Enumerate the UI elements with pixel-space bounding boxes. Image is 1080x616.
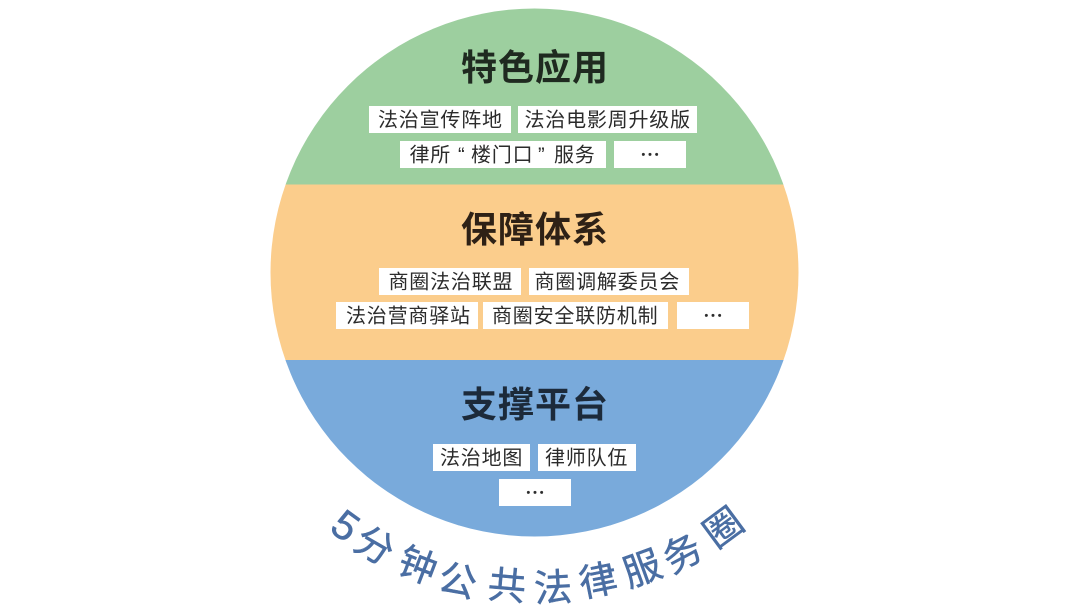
- chip: more: [499, 477, 571, 506]
- chip: 律师队伍: 律师队伍: [545, 446, 628, 470]
- heading: 支撑平台: 支撑平台: [461, 384, 609, 425]
- chip: 律所“楼门口”服务: 律所: [410, 144, 451, 166]
- chip: 商圈法治联盟: 商圈法治联盟: [388, 270, 513, 294]
- curved title: 5分钟公共法律服务圈: 律: [576, 558, 621, 606]
- curved title: 5分钟公共法律服务圈: 分: [347, 519, 401, 574]
- chip: 商圈调解委员会: 商圈调解委员会: [534, 270, 680, 294]
- chip: more: …: [525, 477, 545, 506]
- curved title: 5分钟公共法律服务圈: 5: [323, 500, 368, 551]
- chip: 律所“楼门口”服务: [400, 141, 606, 168]
- chip: 法治地图: [433, 444, 530, 471]
- chip: more: …: [703, 300, 723, 329]
- heading: 特色应用: 特色应用: [461, 47, 609, 88]
- heading: 保障体系: 保障体系: [461, 209, 609, 250]
- chip: 法治宣传阵地: 法治宣传阵地: [378, 108, 503, 132]
- curved title: 5分钟公共法律服务圈: 共: [486, 564, 528, 610]
- panel: 保障体系: [270, 184, 799, 360]
- curved title: 5分钟公共法律服务圈: 服: [618, 544, 668, 596]
- chip: 律所“楼门口”服务: 服务: [554, 144, 596, 166]
- chip: 商圈安全联防机制: 商圈安全联防机制: [492, 304, 658, 328]
- chip: 法治营商驿站: 法治营商驿站: [346, 304, 471, 328]
- chip: 律所“楼门口”服务: 楼门口: [471, 144, 533, 166]
- curved title: 5分钟公共法律服务圈: 法: [533, 567, 573, 611]
- curved title: 5分钟公共法律服务圈: [323, 500, 752, 611]
- chip: 律所“楼门口”服务: “: [458, 144, 465, 166]
- panel: 特色应用: [270, 8, 799, 184]
- chip: more: …: [640, 139, 660, 168]
- chip: more: [677, 300, 749, 329]
- chip: more: [614, 139, 686, 168]
- curved title: 5分钟公共法律服务圈: 圈: [696, 500, 752, 557]
- chip: 律师队伍: [538, 444, 636, 471]
- chip: 律所“楼门口”服务: ”: [538, 144, 545, 166]
- chip: 法治电影周升级版: 法治电影周升级版: [524, 108, 691, 132]
- curved title: 5分钟公共法律服务圈: 务: [656, 527, 710, 582]
- curved title: 5分钟公共法律服务圈: 公: [434, 557, 481, 607]
- curved title: 5分钟公共法律服务圈: 钟: [392, 540, 443, 593]
- panel: 支撑平台: [270, 360, 799, 538]
- chip: 法治地图: 法治地图: [440, 446, 523, 470]
